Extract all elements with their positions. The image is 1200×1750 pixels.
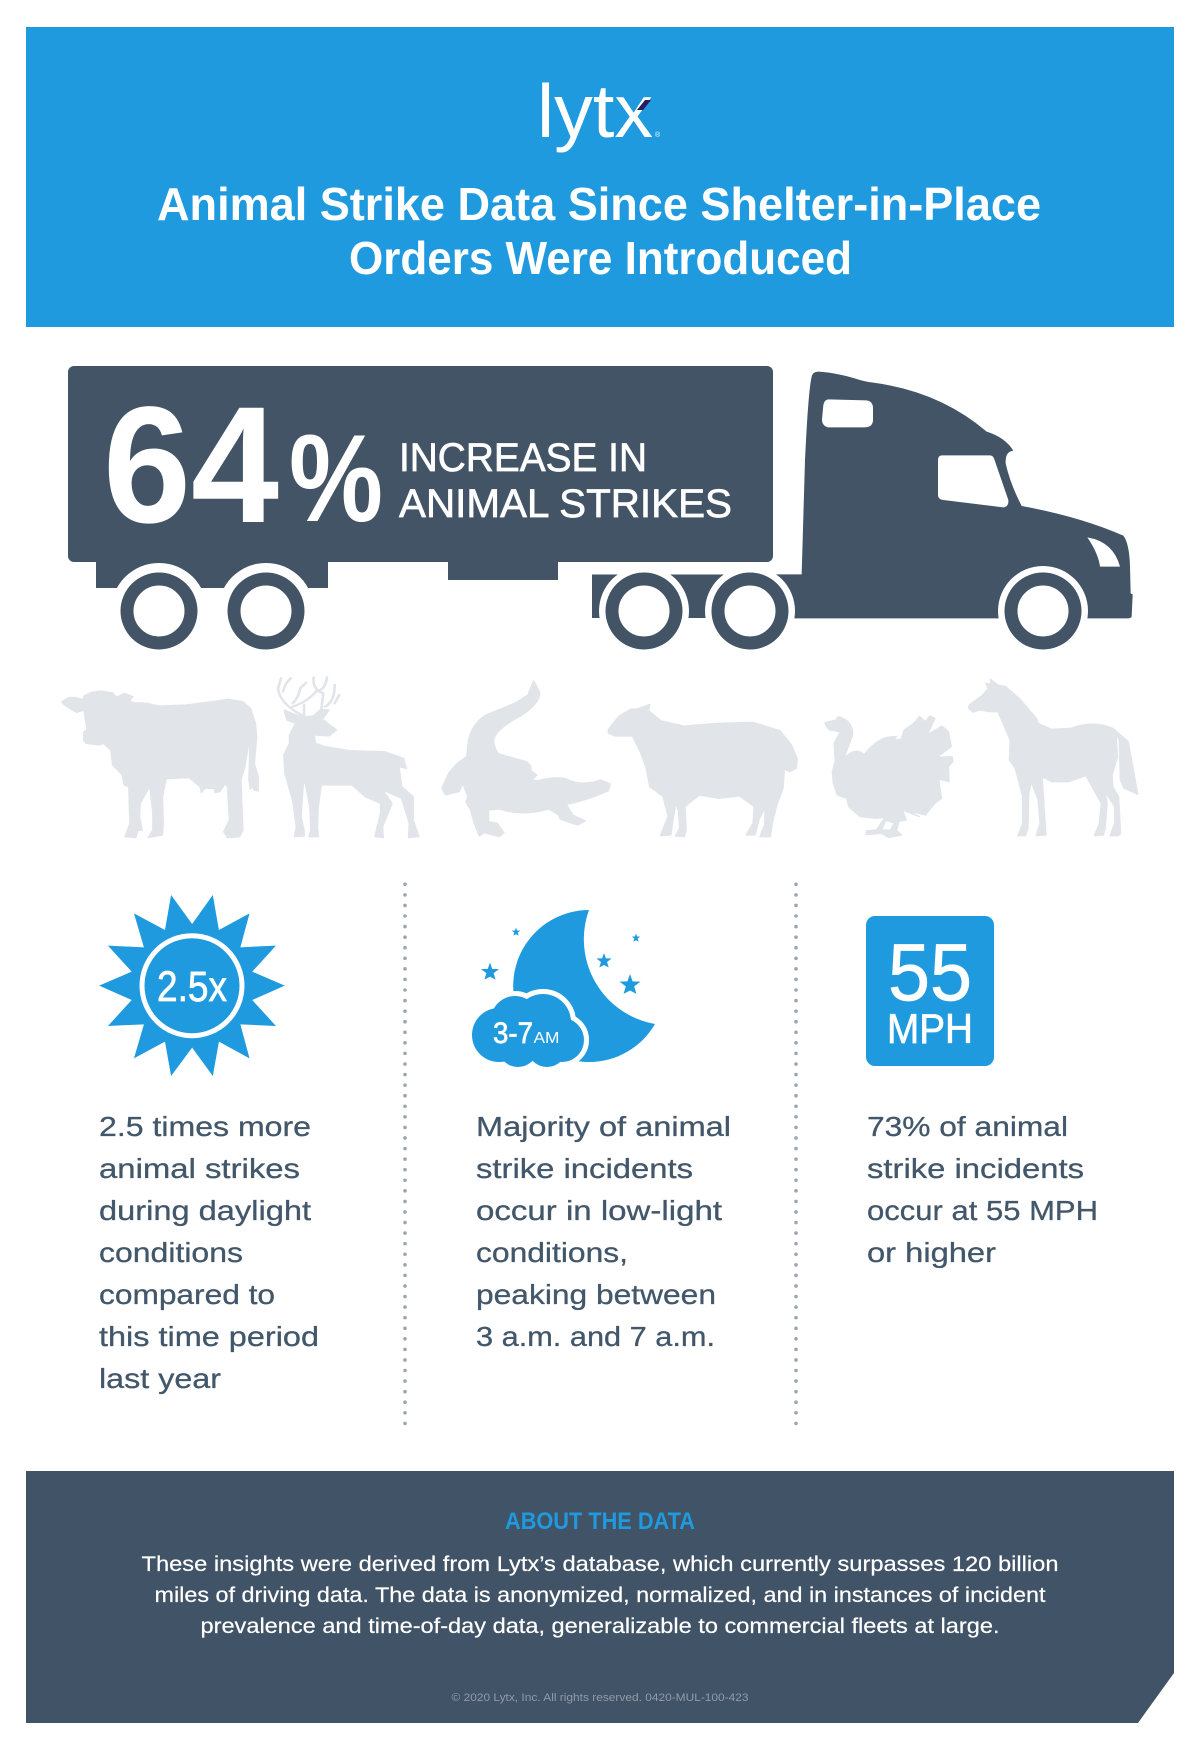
panel: about the data (26, 1471, 1174, 1723)
icon: cow (62, 691, 258, 838)
text: low-light description: 3 a.m. and 7 a.m. (476, 1321, 715, 1352)
text: data description: prevalence and time-of-day data, generalizable to commercial fleets at large. (200, 1615, 1000, 1638)
text: low-light description: strike incidents (476, 1153, 693, 1184)
text: daylight description: last year (99, 1363, 221, 1394)
icon: moon, stars and cloud with 3-7AM: 3-7 (493, 1017, 533, 1050)
text: daylight description: animal strikes (99, 1153, 300, 1184)
text: daylight description: this time period (99, 1321, 319, 1352)
text: daylight description (99, 1111, 319, 1394)
trailer box (68, 366, 773, 588)
icon: horse (969, 679, 1138, 836)
icon: 55 MPH speed sign: 55 (888, 928, 972, 1018)
icon: 55 MPH speed sign (866, 916, 994, 1066)
icon: moon, stars and cloud with 3-7AM: AM (534, 1030, 560, 1047)
panel: low-light statistic (472, 910, 731, 1352)
text: low-light description: conditions, (476, 1237, 628, 1268)
tractor cab (592, 372, 1133, 618)
text: low-light description: Majority of animal (476, 1111, 731, 1142)
panel: speed statistic (866, 916, 1098, 1268)
icon: sun with 2.5x (99, 895, 285, 1076)
statistic: 64% increase in animal strikes: 64 (103, 373, 279, 558)
text: low-light description: occur in low-light (476, 1195, 722, 1226)
text: daylight description: 2.5 times more (99, 1111, 311, 1142)
text: data description (142, 1553, 1058, 1638)
logo: lytx: lytx (537, 69, 653, 153)
text: data description: miles of driving data. The data is anonymized, normalized, and in instances of incident (154, 1584, 1046, 1607)
statistic: 64% increase in animal strikes: ANIMAL STRIKES (399, 482, 732, 526)
text: speed description: strike incidents (867, 1153, 1084, 1184)
icon: 55 MPH speed sign: MPH (887, 1005, 973, 1052)
icon: sheep (608, 704, 797, 837)
text: low-light description: peaking between (476, 1279, 716, 1310)
icon: moon, stars and cloud with 3-7AM (472, 910, 655, 1067)
wheels (111, 563, 1088, 659)
animal silhouettes: sheep, turkey, horse (608, 679, 1138, 838)
text: low-light description (476, 1111, 731, 1352)
title (157, 178, 1041, 284)
statistic: 64% increase in animal strikes: INCREASE IN (399, 436, 647, 480)
text: copyright: © 2020 Lytx, Inc. All rights reserved. 0420-MUL-100-423 (452, 1692, 748, 1704)
statistic: 64% increase in animal strikes (103, 373, 732, 558)
logo: lytx: ® (655, 131, 661, 139)
text: daylight description: conditions (99, 1237, 243, 1268)
text: speed description: or higher (867, 1237, 996, 1268)
icon: sun with 2.5x: 2.5x (157, 963, 227, 1011)
text: speed description: occur at 55 MPH (867, 1195, 1098, 1226)
icon: deer (278, 677, 419, 838)
heading: about the data: ABOUT THE DATA (505, 1508, 695, 1535)
truck illustration with 64% statistic (68, 366, 1133, 659)
panel: daylight statistic (99, 895, 319, 1394)
text: speed description: 73% of animal (867, 1111, 1068, 1142)
text: data description: These insights were derived from Lytx’s database, which currently surpasses 120 billion (142, 1553, 1058, 1576)
title: Orders Were Introduced (349, 232, 852, 284)
animal silhouettes: cow, deer, alligator (62, 677, 610, 838)
icon: alligator (442, 681, 610, 837)
statistic: 64% increase in animal strikes: % (289, 410, 383, 548)
panel: header banner (26, 27, 1174, 327)
title: Animal Strike Data Since Shelter-in-Place (157, 178, 1041, 230)
text: daylight description: during daylight (99, 1195, 311, 1226)
text: daylight description: compared to (99, 1279, 275, 1310)
icon: turkey (825, 716, 953, 838)
text: speed description (867, 1111, 1098, 1268)
